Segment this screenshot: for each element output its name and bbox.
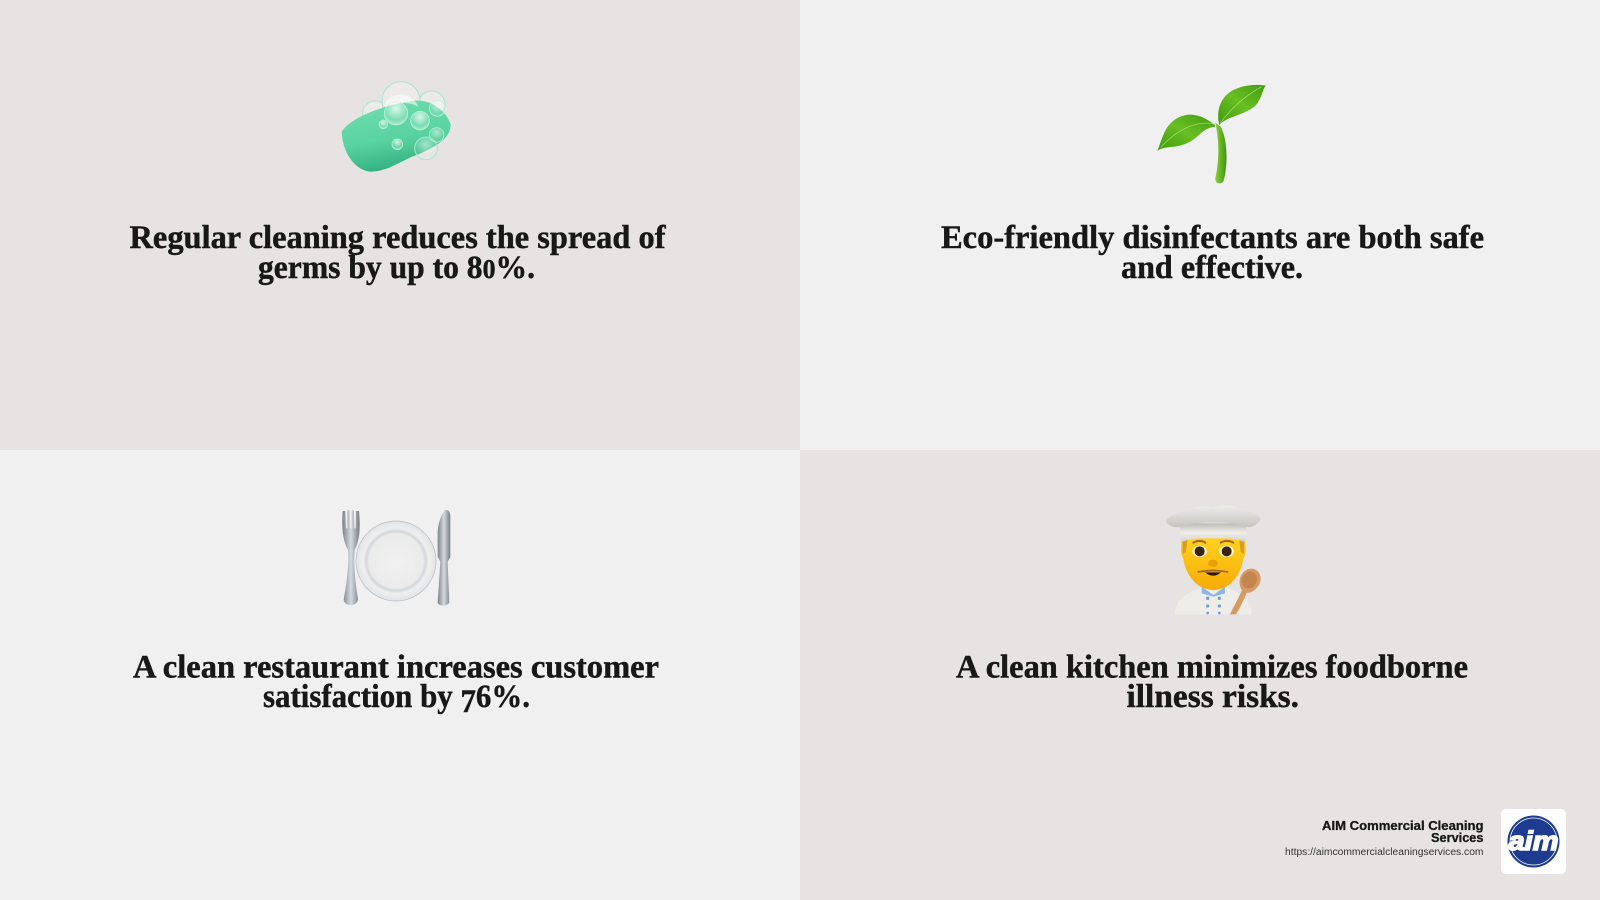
heading: eco-friendly: and effective. <box>1121 250 1303 286</box>
icon: soap with bubbles <box>342 82 451 172</box>
company name and url: https://aimcommercialcleaningservices.com <box>1285 847 1484 858</box>
heading: kitchen safety: A clean kitchen minimizes foodborne <box>956 650 1468 686</box>
heading: customer satisfaction: A clean restaurant increases customer <box>133 650 659 686</box>
panel: customer satisfaction (bottom left) <box>0 450 800 900</box>
icon: chef <box>1166 505 1261 614</box>
logo: aim <box>1501 809 1566 874</box>
heading: germs: Regular cleaning reduces the spread of <box>130 220 666 256</box>
heading: customer satisfaction: 7 <box>460 684 476 720</box>
icon: plate with fork and knife <box>342 510 450 606</box>
panel: germs (top left) <box>0 0 800 450</box>
heading: customer satisfaction: %. <box>491 679 533 715</box>
heading: customer satisfaction <box>133 650 659 720</box>
panel: kitchen safety (bottom right) <box>800 450 1600 900</box>
footer brand block <box>1285 809 1566 874</box>
heading: kitchen safety: illness risks. <box>1126 679 1299 715</box>
heading: customer satisfaction: satisfaction by <box>263 679 466 715</box>
logo: aim: aim <box>1508 826 1558 856</box>
heading: eco-friendly: Eco-friendly disinfectants are both safe <box>941 220 1484 256</box>
heading: germs <box>130 220 666 286</box>
company name and url: Services <box>1431 830 1484 845</box>
heading: kitchen safety <box>956 650 1468 715</box>
heading: eco-friendly <box>941 220 1484 286</box>
icon: seedling <box>1157 85 1266 183</box>
company name and url: AIM Commercial Cleaning <box>1322 818 1484 833</box>
company name and url <box>1285 818 1484 858</box>
heading: customer satisfaction: 6 <box>476 679 491 715</box>
heading: germs: germs by up to 80%. <box>258 250 535 286</box>
panel: eco-friendly (top right) <box>800 0 1600 450</box>
